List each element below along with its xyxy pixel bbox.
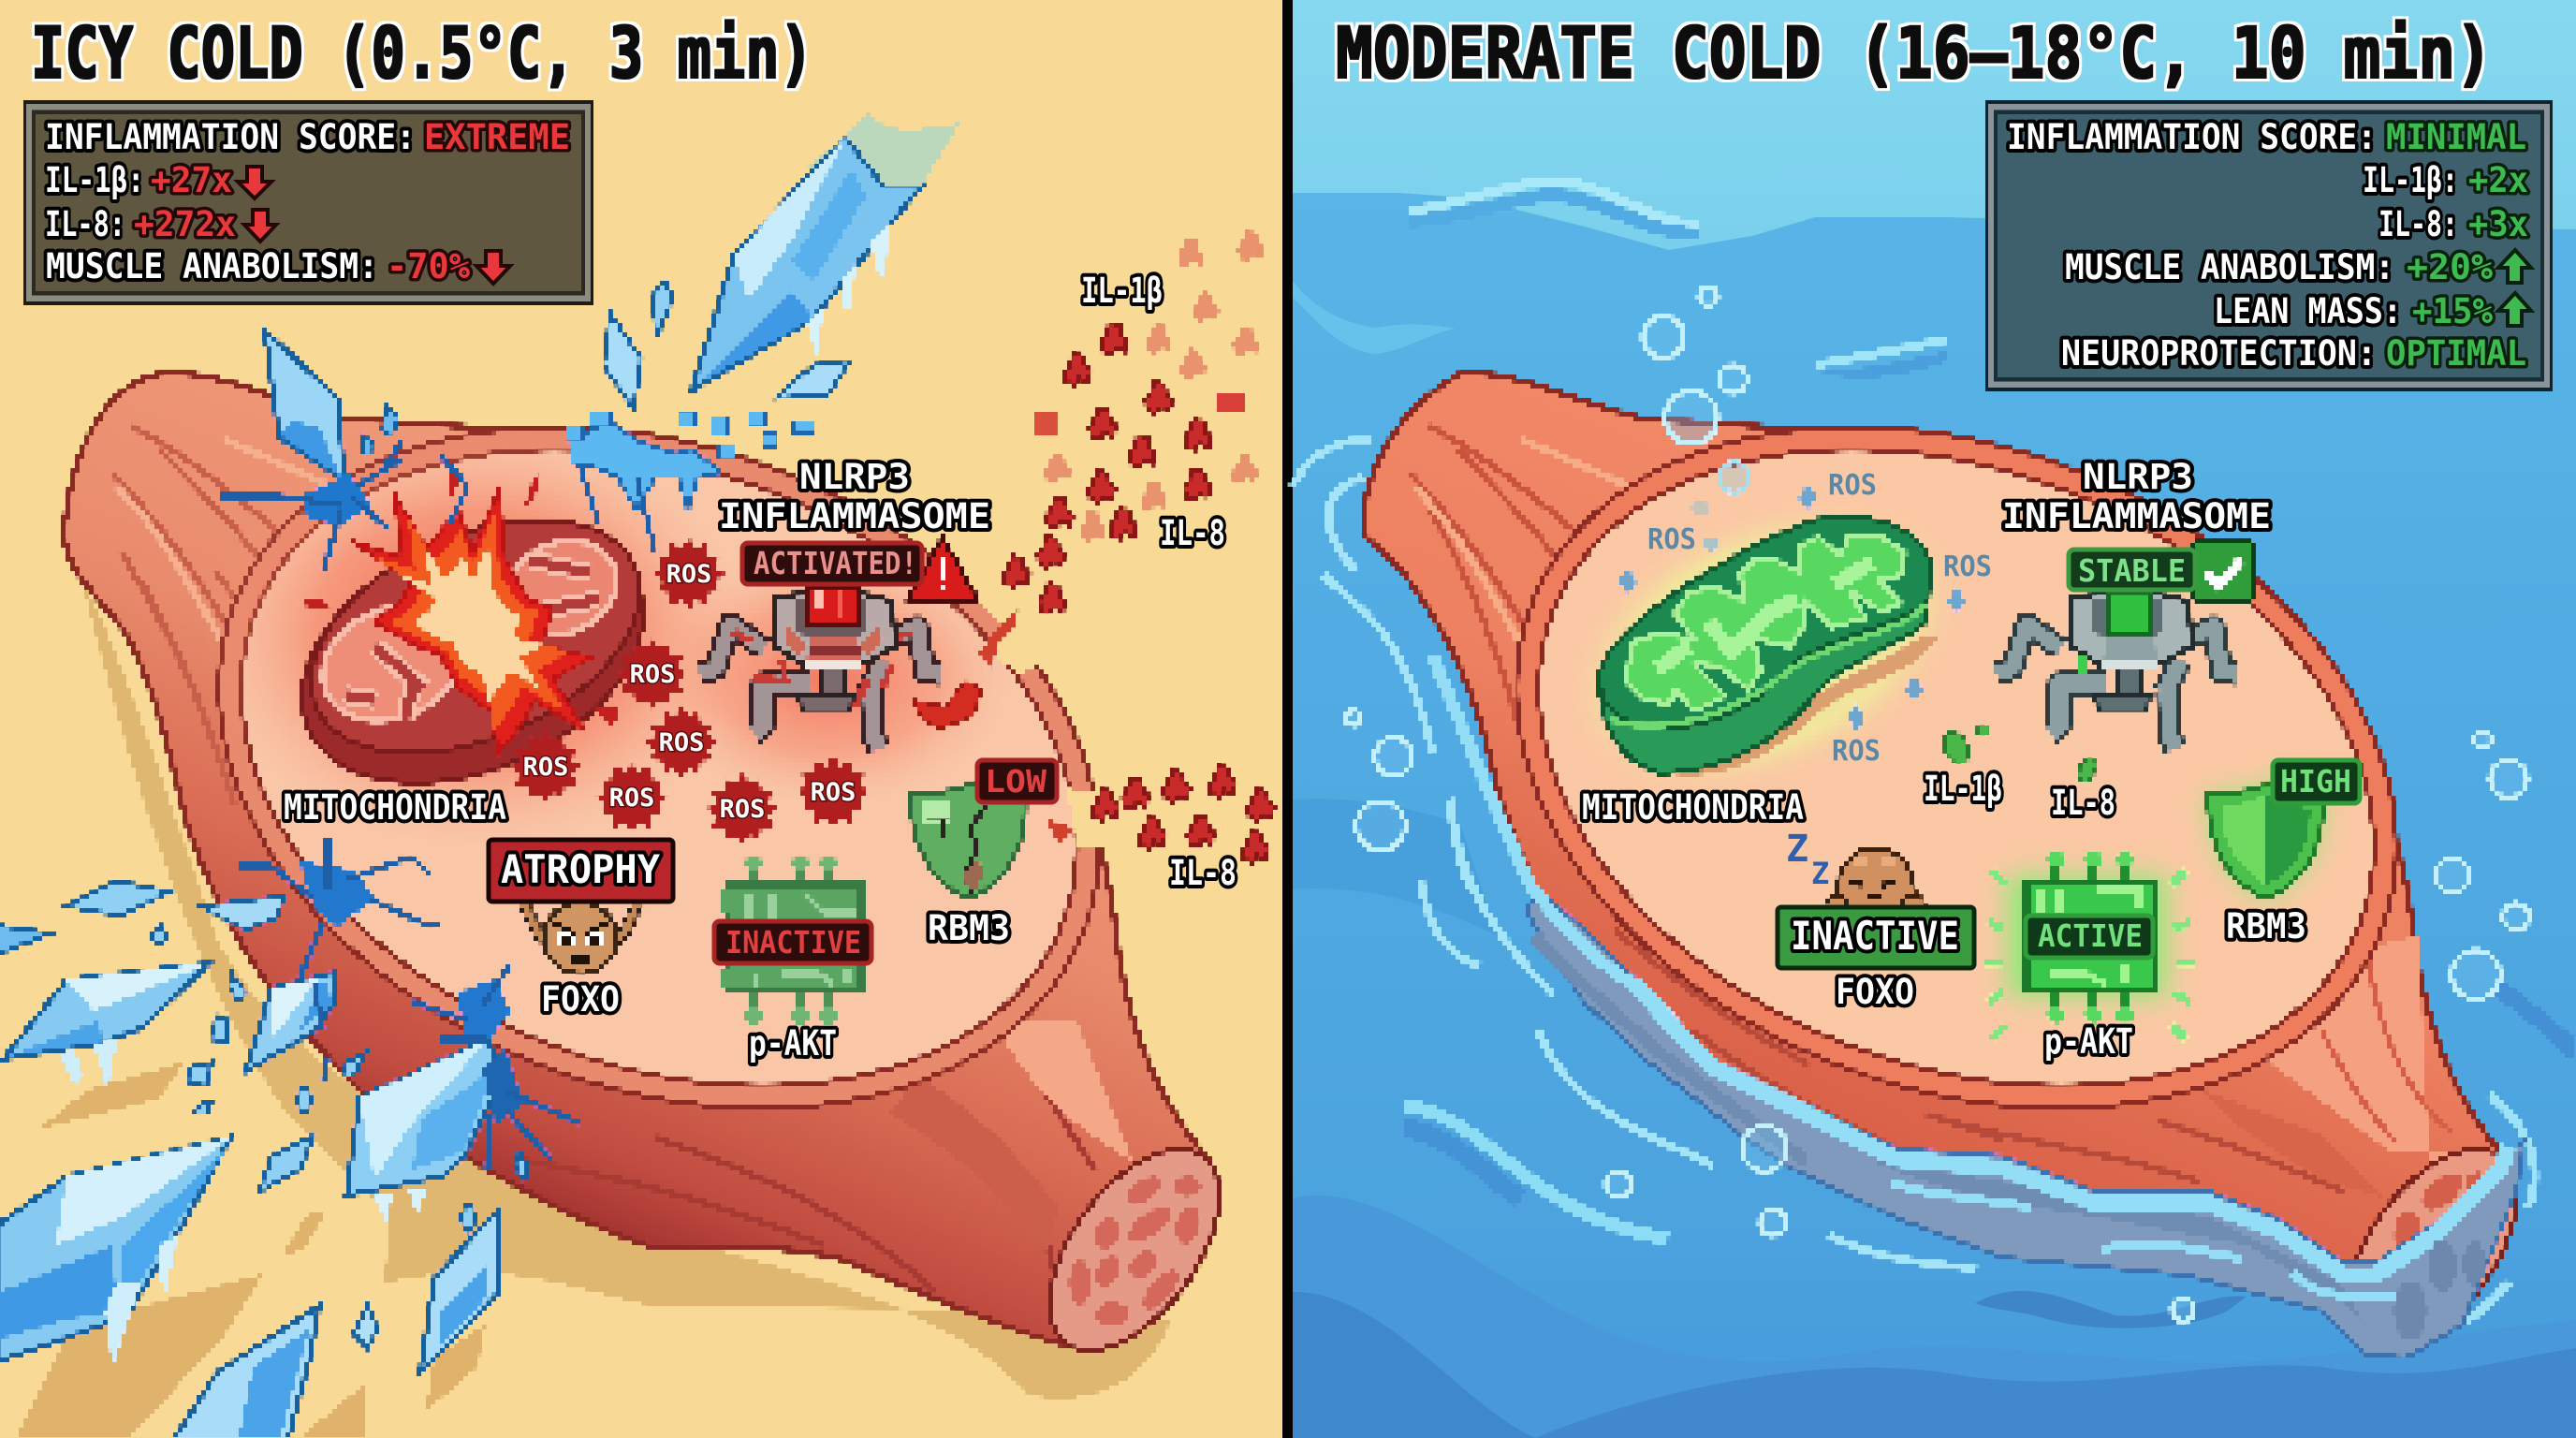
label: ROS: ROS <box>720 795 765 824</box>
warning icon <box>907 537 978 600</box>
stats panel left: INFLAMMATION SCORE: <box>45 117 416 157</box>
big shard lower left <box>0 1137 230 1367</box>
stats panel right: LEAN MASS: <box>2214 291 2402 331</box>
shadows on sand <box>82 580 1170 1398</box>
tag: low: LOW <box>985 763 1046 800</box>
RBM3 shield glowing <box>2208 773 2322 899</box>
icon: sleeping Z <box>1786 828 1829 891</box>
panel: icy cold artwork <box>0 112 1274 1438</box>
label: mitochondria left: MITOCHONDRIA <box>284 787 506 828</box>
label: NLRP3 inflammasome left: NLRP3 <box>799 457 910 497</box>
tag: inactive FOXO <box>1778 907 1974 968</box>
check icon <box>2193 541 2252 602</box>
tag: activated: ACTIVATED! <box>754 545 917 581</box>
labels: cytokines left: IL-8 <box>1169 853 1237 893</box>
stats panel left: -70% <box>387 246 471 286</box>
ring <box>1417 306 2496 1229</box>
RBM3 shield cracked <box>911 773 1025 899</box>
label: ROS: ROS <box>659 728 704 757</box>
upper right large shard <box>692 112 959 390</box>
tag: stable: STABLE <box>2078 552 2186 589</box>
labels: cytokines right: IL-1β <box>1924 769 2002 809</box>
FOXO angry face <box>522 901 639 974</box>
tag: atrophy: ATROPHY <box>501 846 661 892</box>
FOXO sleeping face <box>1825 848 1925 917</box>
muscle: icy <box>65 374 1215 1351</box>
labels: cytokines left: IL-8 <box>1160 513 1225 553</box>
icon: sleeping Z: Z <box>1786 828 1808 871</box>
label: NLRP3 inflammasome right: INFLAMMASOME <box>2002 496 2271 536</box>
labels: cytokines right: IL-8 <box>2051 783 2115 823</box>
label: p-AKT left: p-AKT <box>749 1023 837 1064</box>
p-AKT chip bright <box>1984 851 2195 1039</box>
label: FOXO left: FOXO <box>541 979 620 1020</box>
label: ROS: ROS <box>811 778 856 807</box>
label: ROS: ROS <box>523 753 568 782</box>
stats panel right: IL-8: <box>2378 204 2458 244</box>
ice shards <box>0 112 959 1438</box>
label: FOXO right: FOXO <box>1836 972 1914 1012</box>
cut end of muscle <box>1017 1120 1252 1380</box>
stats panel right: +20% <box>2407 247 2494 287</box>
panel: icy cold background <box>0 0 1282 1438</box>
tag: inactive FOXO: INACTIVE <box>1791 913 1959 959</box>
main shard in muscle <box>346 1039 502 1222</box>
stats panel right: MINIMAL <box>2386 117 2526 157</box>
mitochondrion ruptured <box>262 474 683 833</box>
labels: ROS right: ROS <box>1943 550 1992 583</box>
label: NLRP3 inflammasome left: INFLAMMASOME <box>719 496 990 536</box>
stats panel left: +27x <box>151 160 232 200</box>
panel: moderate cold water background <box>1293 0 2576 1438</box>
stats panel left: EXTREME <box>424 117 570 157</box>
stats panel right: +15% <box>2412 291 2494 331</box>
tag: low <box>977 760 1057 802</box>
tag: active: ACTIVE <box>2038 917 2143 954</box>
stats panel left: IL-8: <box>45 204 125 244</box>
ROS bursts <box>510 538 869 844</box>
waves on water <box>1293 181 2576 1337</box>
stats panel right: +2x <box>2468 160 2528 200</box>
cytokines small <box>1939 725 2100 785</box>
label: NLRP3 inflammasome left <box>719 457 990 536</box>
stats panel right: INFLAMMATION SCORE: <box>2007 117 2377 157</box>
tag: high: HIGH <box>2280 763 2351 800</box>
cut end <box>2314 1120 2550 1380</box>
icon: sleeping Z: Z <box>1811 856 1829 891</box>
p-AKT chip dim <box>719 855 861 1025</box>
NLRP3 robot activated <box>699 587 941 749</box>
label: NLRP3 inflammasome right <box>2002 457 2271 536</box>
cytokines released <box>913 230 1274 862</box>
label: RBM3 right: RBM3 <box>2226 906 2306 946</box>
NLRP3 robot stable <box>1996 592 2237 749</box>
inflammation glow <box>206 426 1011 847</box>
stats panel right <box>1985 100 2553 391</box>
label: ROS: ROS <box>609 784 654 813</box>
title left: ICY COLD (0.5°C, 3 min) <box>31 11 813 95</box>
label: ROS <box>523 560 856 824</box>
water surface over muscle <box>1432 655 2524 1357</box>
label: ROS: ROS <box>666 560 711 589</box>
label: p-AKT right: p-AKT <box>2044 1021 2133 1062</box>
stats panel left: MUSCLE ANABOLISM: <box>46 246 378 286</box>
bubbles <box>1346 286 2529 1321</box>
cracks and splash <box>220 412 814 1170</box>
muscle cross-section ring <box>120 306 1198 1229</box>
label: ROS: ROS <box>630 660 675 689</box>
tag: inactive chip: INACTIVE <box>725 924 861 961</box>
label: mitochondria right: MITOCHONDRIA <box>1582 787 1804 828</box>
labels: ROS right: ROS <box>1832 735 1881 768</box>
stats panel right: +3x <box>2468 204 2528 244</box>
stats panel right: NEUROPROTECTION: <box>2061 333 2377 374</box>
stats panel right: MUSCLE ANABOLISM: <box>2065 247 2394 287</box>
label: RBM3 left: RBM3 <box>928 908 1010 948</box>
labels: ROS right: ROS <box>1647 523 1696 556</box>
labels: cytokines right <box>1924 769 2115 823</box>
stats panel right: OPTIMAL <box>2386 333 2526 374</box>
stats panel right: IL-1β: <box>2363 160 2458 200</box>
explosion <box>304 468 618 753</box>
divider <box>1282 0 1293 1438</box>
muscle: moderate <box>1364 374 2512 1311</box>
labels: ROS right <box>1647 469 1992 768</box>
tag: atrophy <box>489 840 673 902</box>
labels: cytokines left: IL-1β <box>1081 271 1163 311</box>
label: NLRP3 inflammasome right: NLRP3 <box>2083 457 2193 497</box>
stats panel left: IL-1β: <box>45 160 144 200</box>
ring breach gaps <box>866 459 1123 847</box>
labels: ROS right: ROS <box>1828 469 1877 502</box>
stats panel left <box>23 100 593 305</box>
mitochondrion healthy <box>1521 442 2008 850</box>
panel: moderate cold artwork <box>1293 181 2576 1380</box>
ROS sparkles <box>1618 484 1966 730</box>
stats panel left: +272x <box>134 204 236 244</box>
labels: cytokines left <box>1081 271 1237 893</box>
